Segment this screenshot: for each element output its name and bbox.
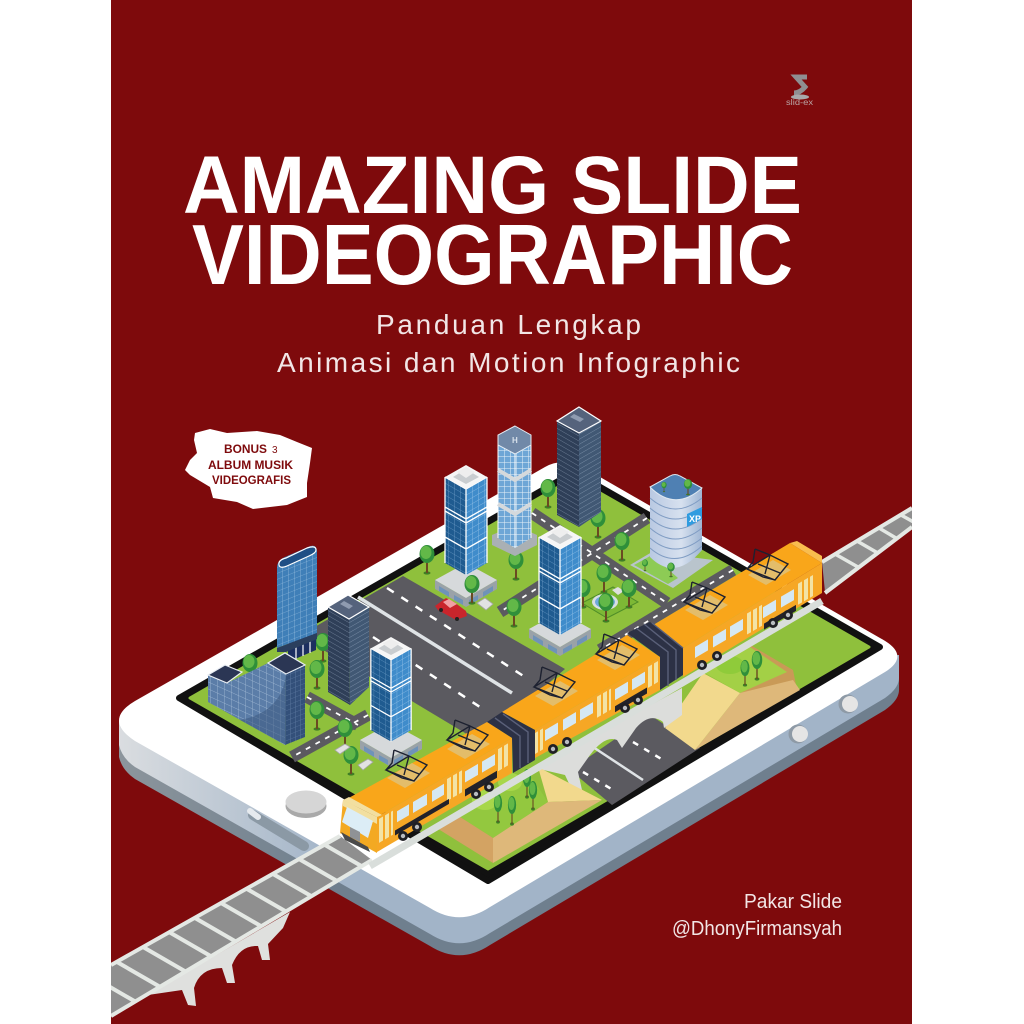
badge: bonus: 3 <box>272 445 278 456</box>
right railway track <box>822 508 919 593</box>
accordion joint 1 <box>487 712 535 773</box>
home button <box>286 790 326 818</box>
subtitle <box>277 309 740 378</box>
car <box>435 598 467 621</box>
red cover background <box>111 0 912 1024</box>
city ground <box>190 478 869 869</box>
author <box>672 891 842 940</box>
cover artwork <box>65 77 919 1017</box>
badge: bonus <box>185 429 312 509</box>
underpass road <box>570 715 700 805</box>
building: helipad hex tower <box>492 426 537 556</box>
rail under train <box>370 601 822 866</box>
main road <box>316 576 565 734</box>
building: XP cylinder tower: XP <box>689 514 701 524</box>
train car 2 <box>502 635 660 759</box>
trees in front of buildings <box>310 575 480 731</box>
trees behind buildings <box>242 479 636 684</box>
tablet <box>119 462 899 955</box>
building: blue tower front <box>360 637 422 767</box>
side button 1 <box>838 694 858 714</box>
benches <box>335 598 493 770</box>
train car 3 <box>650 541 822 677</box>
bridge wall <box>535 688 682 792</box>
badge: bonus: BONUS <box>224 442 267 456</box>
embankment right <box>665 643 800 750</box>
train front cab <box>340 797 382 853</box>
embankment left <box>435 767 602 863</box>
side roads <box>292 513 733 757</box>
accordion joint 2 <box>627 622 683 690</box>
author: Pakar Slide <box>744 891 842 913</box>
building: rounded blue slab <box>277 546 317 662</box>
train car 1 <box>345 722 512 852</box>
left railway track <box>111 834 372 1018</box>
train <box>340 541 822 853</box>
building: blue tower 3 middle <box>529 525 591 656</box>
wheels <box>398 610 793 841</box>
roof plates <box>387 560 791 788</box>
badge: bonus: VIDEOGRAFIS <box>212 473 291 487</box>
author: @DhonyFirmansyah <box>672 918 842 940</box>
badge: bonus: ALBUM MUSIK <box>208 458 293 472</box>
building: plinth and blue tower 1 <box>435 465 497 607</box>
logo: slid-ex: slid-ex <box>786 98 813 107</box>
building: wide glass block <box>208 653 305 745</box>
book cover illustration <box>111 0 912 1024</box>
road dashes <box>292 513 733 757</box>
building: helipad hex tower: H <box>512 436 518 445</box>
bridge under left track <box>148 912 290 1006</box>
title: VIDEOGRAPHIC <box>192 208 793 303</box>
side button 2 <box>788 724 808 744</box>
title: AMAZING SLIDE <box>183 140 802 231</box>
subtitle: Panduan Lengkap <box>376 309 641 340</box>
park with pond <box>582 587 638 618</box>
speaker slot <box>250 811 304 846</box>
building: dark tower left <box>328 595 369 705</box>
building: dark tower back <box>557 407 601 527</box>
logo: slid-ex <box>786 77 813 107</box>
subtitle: Animasi dan Motion Infographic <box>277 347 740 378</box>
building: XP cylinder tower <box>630 474 713 588</box>
front trees <box>338 719 358 776</box>
pantographs <box>386 549 788 781</box>
tablet screen bezel <box>179 472 880 881</box>
title <box>185 156 799 285</box>
